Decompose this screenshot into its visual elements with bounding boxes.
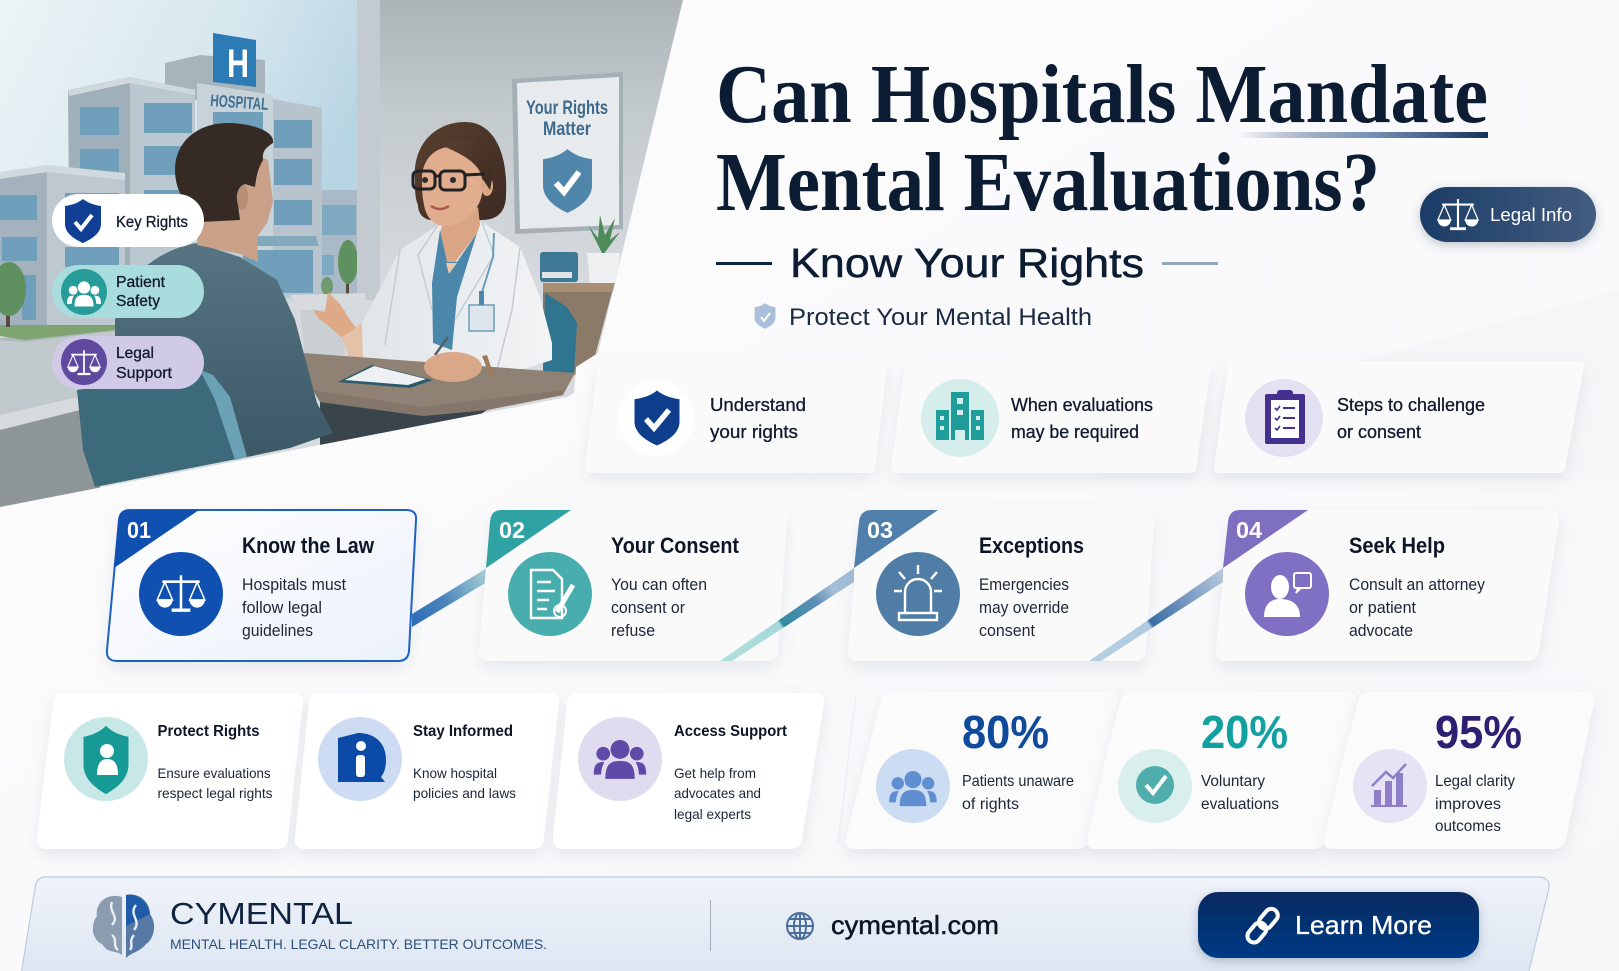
pill: legal support bbox=[52, 336, 204, 389]
button: learn more bbox=[1198, 892, 1479, 958]
legal info badge bbox=[1420, 187, 1596, 242]
pill: key rights: Key Rights bbox=[116, 214, 188, 231]
H sign on hospital: H bbox=[227, 42, 249, 86]
info card: protect rights bbox=[37, 693, 303, 849]
title: Can Hospitals Mandate bbox=[716, 48, 1488, 141]
window with hospital view bbox=[0, 0, 358, 418]
step card 03: exceptions: Emergencies bbox=[979, 576, 1069, 594]
stat card: 80% bbox=[846, 692, 1118, 849]
legal info badge: Legal Info bbox=[1490, 204, 1572, 225]
icon: shield check bbox=[65, 199, 101, 243]
desk with clipboard bbox=[303, 337, 575, 450]
coat lapels and sleeve folds bbox=[385, 222, 520, 370]
stat card: 20%: Voluntary bbox=[1201, 773, 1265, 790]
info card: access support: legal experts bbox=[674, 806, 751, 822]
step card 01: know the law: 01 bbox=[127, 517, 151, 543]
patient bbox=[115, 123, 333, 460]
icon: clipboard checklist bbox=[1245, 379, 1323, 457]
subtitle: know your rights: Know Your Rights bbox=[790, 240, 1144, 286]
logo: brain icon bbox=[93, 894, 154, 958]
window frame bbox=[357, 0, 380, 300]
feature card: when evaluations may be required: may be required bbox=[1011, 422, 1139, 442]
pill: key rights bbox=[52, 194, 204, 247]
icon: info bubble bbox=[318, 717, 402, 801]
step card 01: know the law: guidelines bbox=[242, 622, 313, 640]
info card: protect rights: Ensure evaluations bbox=[158, 765, 270, 781]
step card 04: seek help: advocate bbox=[1349, 622, 1413, 640]
step card 04: seek help: 04 bbox=[1236, 517, 1262, 543]
stat card: 80%: Patients unaware bbox=[962, 773, 1074, 790]
icon: check circle bbox=[1118, 749, 1192, 823]
footer bar: CYMENTAL bbox=[170, 896, 353, 931]
poster: your rights matter: Your Rights bbox=[526, 98, 608, 119]
stat card: 95% bbox=[1324, 692, 1594, 849]
pill: patient safety: Safety bbox=[116, 293, 160, 310]
shelf, books and plant bbox=[540, 215, 620, 375]
info card: stay informed: Stay Informed bbox=[413, 723, 513, 740]
footer bar: MENTAL HEALTH. LEGAL CLARITY. BETTER OUTCOMES. bbox=[170, 936, 547, 952]
icon: alarm light bbox=[876, 552, 960, 636]
hospital label: HOSPITAL bbox=[210, 91, 269, 114]
step card 01: know the law: Know the Law bbox=[242, 533, 375, 558]
feature card: steps to challenge or consent: or consent bbox=[1337, 422, 1421, 442]
connector 03 to 04 bbox=[1089, 568, 1223, 661]
poster: your rights matter: Matter bbox=[543, 119, 592, 140]
feature card: when evaluations may be required bbox=[896, 366, 1206, 468]
step card 01: know the law bbox=[107, 510, 416, 661]
stat card: 95%: improves bbox=[1435, 796, 1501, 813]
stat card: 20%: evaluations bbox=[1201, 796, 1279, 813]
info card: stay informed bbox=[295, 693, 559, 849]
icon: shield bbox=[618, 380, 694, 456]
title: Mental Evaluations? bbox=[716, 136, 1380, 229]
step card 01: know the law: follow legal bbox=[242, 599, 322, 617]
patient chair bbox=[77, 370, 247, 487]
icon: teal hospital bbox=[921, 379, 999, 457]
stat card: 95%: outcomes bbox=[1435, 818, 1501, 835]
icon: document and pen bbox=[508, 552, 592, 636]
step card 01: know the law: Hospitals must bbox=[242, 576, 346, 594]
info card: protect rights: Protect Rights bbox=[158, 723, 260, 740]
step card 02: your consent bbox=[479, 510, 787, 661]
connector 01 to 02 bbox=[412, 568, 487, 627]
info card: access support: Access Support bbox=[674, 723, 788, 740]
step card 03: exceptions bbox=[848, 510, 1154, 661]
step card 02: your consent: consent or bbox=[611, 599, 685, 617]
connector 02 to 03 bbox=[720, 568, 854, 661]
stat card: 80%: of rights bbox=[962, 796, 1019, 813]
info card: access support bbox=[553, 693, 824, 849]
pill: patient safety bbox=[52, 265, 204, 318]
info card: access support: Get help from bbox=[674, 765, 756, 781]
info card: stay informed: policies and laws bbox=[413, 785, 516, 801]
pill: legal support: Support bbox=[116, 365, 173, 382]
lower wall and sill bbox=[0, 397, 78, 418]
pill: legal support: Legal bbox=[116, 345, 154, 362]
title underline bbox=[1237, 132, 1488, 138]
feature card: when evaluations may be required: When evaluations bbox=[1011, 395, 1153, 415]
stat card: 80%: 80% bbox=[962, 706, 1049, 758]
title bbox=[716, 48, 1488, 229]
doctor bbox=[313, 122, 552, 378]
step card 04: seek help: or patient bbox=[1349, 599, 1416, 617]
info card: access support: advocates and bbox=[674, 785, 761, 801]
tagline: protect your mental health: Protect Your Mental Health bbox=[789, 304, 1092, 331]
icon: person and speech bubble bbox=[1245, 552, 1329, 636]
hero illustration: doctor and patient in hospital office bbox=[0, 0, 700, 510]
icon: people bbox=[876, 749, 950, 823]
step card 02: your consent: Your Consent bbox=[611, 533, 740, 558]
step card 03: exceptions: Exceptions bbox=[979, 533, 1084, 558]
step card 02: your consent: 02 bbox=[499, 517, 525, 543]
step card 03: exceptions: consent bbox=[979, 622, 1035, 640]
subtitle: know your rights bbox=[716, 240, 1218, 286]
step card 04: seek help: Consult an attorney bbox=[1349, 576, 1486, 594]
icon: scales bbox=[139, 552, 223, 636]
poster: your rights matter bbox=[512, 72, 623, 234]
H sign on hospital bbox=[213, 33, 256, 87]
feature card: steps to challenge or consent: Steps to challenge bbox=[1337, 395, 1485, 415]
step card 02: your consent: You can often bbox=[611, 576, 707, 594]
feature card: understand your rights: your rights bbox=[710, 422, 798, 442]
feature card: steps to challenge or consent bbox=[1219, 366, 1579, 468]
step card 03: exceptions: may override bbox=[979, 599, 1069, 617]
doctor chair bbox=[543, 293, 577, 373]
icon: patient group bbox=[61, 269, 107, 315]
stat card: 20%: 20% bbox=[1201, 706, 1288, 758]
step card 04: seek help bbox=[1216, 510, 1559, 661]
button: learn more: Learn More bbox=[1295, 910, 1432, 940]
stat card: 95%: Legal clarity bbox=[1435, 773, 1515, 790]
step card 04: seek help: Seek Help bbox=[1349, 533, 1445, 558]
feature card: understand your rights: Understand bbox=[710, 395, 806, 415]
icon: rising bar chart bbox=[1353, 749, 1427, 823]
icon: purple scales bbox=[61, 339, 107, 385]
stat card: 95%: 95% bbox=[1435, 706, 1522, 758]
step card 03: exceptions: 03 bbox=[867, 517, 893, 543]
feature card: understand your rights bbox=[590, 366, 882, 468]
pill: patient safety: Patient bbox=[116, 274, 166, 291]
icon: people group bbox=[578, 717, 662, 801]
info card: stay informed: Know hospital bbox=[413, 765, 497, 781]
stat card: 20% bbox=[1087, 692, 1356, 849]
step card 02: your consent: refuse bbox=[611, 622, 655, 640]
icon: globe bbox=[787, 913, 813, 939]
footer bar bbox=[21, 877, 1549, 971]
icon: shield person bbox=[64, 717, 148, 801]
info card: protect rights: respect legal rights bbox=[158, 785, 272, 801]
footer bar: cymental.com bbox=[831, 910, 999, 940]
